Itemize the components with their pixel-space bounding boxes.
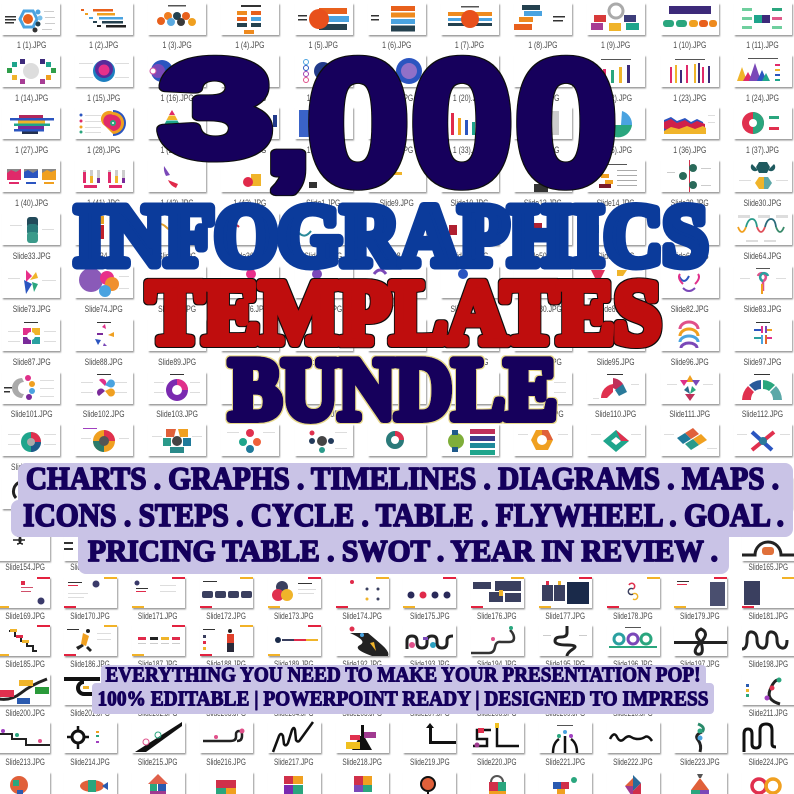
labels row 1: 1 (11).JPG [746,40,779,50]
thumbnail row 7 [2,319,793,352]
lower labels row 5: Slide213.JPG [5,757,45,767]
labels row 3: 1 (37).JPG [746,145,779,155]
lower labels row 4: Slide200.JPG [5,708,45,718]
labels row 2: 1 (21).JPG [526,93,559,103]
lower labels row 4: Slide203.JPG [206,708,246,718]
labels row 8: Slide101.JPG [11,409,53,419]
labels row 1: 1 (3).JPG [163,40,192,50]
lower labels row 3: Slide193.JPG [410,659,450,669]
labels row 2: 1 (20).JPG [453,93,486,103]
thumbnail row 1 [2,3,793,36]
digit 3: 3 [160,33,272,184]
labels row 3: 1 (31).JPG [307,145,340,155]
panel background [11,463,793,574]
thumbnail row 9 [2,424,793,458]
lower labels row 2: Slide176.JPG [477,611,517,621]
labels row 5: Slide35.JPG [158,251,196,261]
lower labels row 5 [5,757,788,767]
labels row 1: 1 (1).JPG [17,40,46,50]
lower labels row 1: Slide154.JPG [5,562,45,572]
lower labels row 2: Slide181.JPG [748,611,788,621]
lower labels row 5: Slide221.JPG [545,757,585,767]
lower labels row 3 [5,659,788,669]
lower labels row 1 [5,562,788,572]
lower labels row 5: Slide214.JPG [70,757,110,767]
lower row 3 [0,625,794,658]
lower labels row 3: Slide189.JPG [274,659,314,669]
labels row 4: 1 (41).JPG [87,198,120,208]
lower labels row 3: Slide185.JPG [5,659,45,669]
lower labels row 2: Slide173.JPG [274,611,314,621]
labels row 2: 1 (19).JPG [380,93,413,103]
thumbnail row 5 [2,213,793,246]
labels row 1: 1 (10).JPG [673,40,706,50]
labels row 5: Slide48.JPG [378,251,416,261]
labels row 8: Slide104.JPG [229,409,271,419]
labels row 5 [13,251,781,261]
tagline line 2: 100% EDITABLE | POWERPOINT READY | DESIGNED TO IMPRESS [98,686,709,710]
labels row 4 [15,198,781,208]
panel: categories [11,460,793,574]
labels row 2: 1 (15).JPG [87,93,120,103]
labels row 6: Slide75.JPG [158,304,196,314]
labels row 8: Slide102.JPG [83,409,125,419]
lower labels row 3: Slide186.JPG [70,659,110,669]
comma: , [266,64,310,198]
labels row 10: Slide152.JPG [742,514,783,524]
labels row 7: Slide96.JPG [671,357,709,367]
labels row 6: Slide78.JPG [378,304,416,314]
lower labels row 2: Slide169.JPG [5,611,45,621]
labels row 3: 1 (28).JPG [87,145,120,155]
lower labels row 2: Slide178.JPG [613,611,653,621]
tagline background [92,665,714,714]
labels row 9 [11,462,783,472]
lower thumbnail grid [0,530,794,794]
lower labels row 4: Slide201.JPG [70,708,110,718]
lower labels row 4: Slide205.JPG [342,708,382,718]
lower labels row 5: Slide219.JPG [410,757,450,767]
tagline line 1: EVERYTHING YOU NEED TO MAKE YOUR PRESENTATION POP! [106,662,700,686]
labels row 3: 1 (33).JPG [453,145,486,155]
labels row 2: 1 (18).JPG [307,93,340,103]
labels row 1: 1 (6).JPG [382,40,411,50]
labels row 4: 1 (40).JPG [15,198,48,208]
labels row 9: Slide128.JPG [742,462,783,472]
labels row 1: 1 (8).JPG [528,40,557,50]
labels row 7: Slide93.JPG [450,357,488,367]
lower labels row 3: Slide198.JPG [748,659,788,669]
labels row 5: Slide49.JPG [450,251,488,261]
lower labels row 5: Slide218.JPG [342,757,382,767]
lower labels row 4 [5,708,788,718]
labels row 2: 1 (17).JPG [233,93,266,103]
labels row 1: 1 (9).JPG [601,40,630,50]
lower labels row 2: Slide171.JPG [138,611,177,621]
labels row 6 [13,304,781,314]
labels row 5: Slide46.JPG [304,251,342,261]
lower labels row 5: Slide224.JPG [748,757,788,767]
lower labels row 2: Slide174.JPG [342,611,382,621]
headline: INFOGRAPHICS: INFOGRAPHICS [74,186,708,284]
lower labels row 5: Slide222.JPG [613,757,653,767]
labels row 5: Slide36.JPG [231,251,269,261]
labels row 1: 1 (5).JPG [309,40,338,50]
labels row 7: Slide88.JPG [85,357,123,367]
thumbnail row 4 [2,160,793,194]
labels row 8: Slide106.JPG [376,409,418,419]
labels row 2: 1 (14).JPG [15,93,48,103]
labels row 4: Slide29.JPG [671,198,709,208]
labels row 7: Slide92.JPG [378,357,416,367]
lower labels row 5: Slide216.JPG [206,757,246,767]
lower labels row 1: Slide165.JPG [748,562,788,572]
labels row 6: Slide74.JPG [85,304,123,314]
labels row 8: Slide103.JPG [156,409,198,419]
upper file-name labels [11,40,783,524]
labels row 6: Slide80.JPG [524,304,562,314]
lower row 1 [0,530,794,562]
labels row 8: Slide111.JPG [669,409,710,419]
labels row 2 [15,93,779,103]
lower labels row 2: Slide172.JPG [206,611,246,621]
labels row 3: 1 (30).JPG [233,145,266,155]
labels row 1: 1 (7).JPG [455,40,484,50]
labels row 4: 1 (42).JPG [161,198,194,208]
lower labels row 2: Slide170.JPG [70,611,110,621]
labels row 7: Slide89.JPG [158,357,196,367]
labels row 3: 1 (27).JPG [15,145,48,155]
categories line 3: PRICING TABLE . SWOT . YEAR IN REVIEW . [88,533,718,568]
labels row 2: 1 (22).JPG [599,93,632,103]
labels row 8: Slide107.JPG [449,409,490,419]
lower row 2 [0,577,794,610]
lower row 5 [0,722,794,754]
labels row 1: 1 (4).JPG [235,40,264,50]
lower labels row 4: Slide207.JPG [410,708,450,718]
lower labels row 4: Slide209.JPG [545,708,585,718]
labels row 5: Slide64.JPG [743,251,781,261]
labels row 3: 1 (34).JPG [526,145,559,155]
labels row 6: Slide83.JPG [743,304,781,314]
labels row 5: Slide34.JPG [85,251,123,261]
thumbnail row 8 [2,372,793,406]
labels row 4: Slide10.JPG [450,198,488,208]
lower labels row 4: Slide204.JPG [274,708,314,718]
labels row 7: Slide87.JPG [13,357,51,367]
labels row 5: Slide33.JPG [13,251,51,261]
panel: tagline [92,662,714,714]
labels row 1: 1 (2).JPG [89,40,118,50]
labels row 7: Slide95.JPG [597,357,635,367]
lower labels row 5: Slide217.JPG [274,757,314,767]
thumbnail row 6 [2,266,793,300]
labels row 8 [11,409,783,419]
labels row 2: 1 (16).JPG [161,93,194,103]
labels row 8: Slide110.JPG [595,409,636,419]
labels row 6: Slide77.JPG [304,304,342,314]
labels row 8: Slide108.JPG [522,409,564,419]
labels row 5: Slide60.JPG [671,251,709,261]
lower labels row 3: Slide197.JPG [680,659,720,669]
lower file-name labels [5,562,788,767]
headline: 3,000 [160,23,618,222]
lower labels row 5: Slide223.JPG [680,757,720,767]
labels row 6: Slide82.JPG [671,304,709,314]
lower labels row 5: Slide220.JPG [477,757,517,767]
labels row 4: Slide30.JPG [743,198,781,208]
labels row 5: Slide52.JPG [597,251,635,261]
thumbnail row 2 [2,55,793,88]
lower labels row 2: Slide177.JPG [545,611,585,621]
lower labels row 3: Slide192.JPG [342,659,382,669]
labels row 9: Slide115.JPG [11,462,52,472]
labels row 7: Slide90.JPG [231,357,269,367]
headline: TEMPLATES: TEMPLATES [147,264,661,362]
labels row 3: 1 (29).JPG [161,145,194,155]
zeros: 000 [306,23,618,222]
labels row 2: 1 (23).JPG [673,93,706,103]
labels row 3 [15,145,779,155]
lower labels row 1: Slide155.JPG [70,562,110,572]
labels row 6: Slide81.JPG [597,304,635,314]
lower labels row 5: Slide215.JPG [138,757,177,767]
labels row 1 [17,40,779,50]
labels row 4: Slide13.JPG [524,198,562,208]
labels row 7: Slide91.JPG [304,357,342,367]
labels row 4: Slide9.JPG [380,198,414,208]
labels row 8: Slide105.JPG [302,409,344,419]
lower labels row 2 [5,611,788,621]
lower labels row 3: Slide194.JPG [477,659,517,669]
lower row 6 [0,772,794,794]
labels row 6: Slide73.JPG [13,304,51,314]
labels row 4: Slide14.JPG [597,198,635,208]
thumbnail row 3 [2,107,793,140]
lower row 4 [0,674,794,706]
labels row 3: 1 (36).JPG [673,145,706,155]
labels row 4: Slide1.JPG [306,198,340,208]
labels row 7: Slide94.JPG [524,357,562,367]
headline: BUNDLE: BUNDLE [229,342,557,438]
labels row 4: 1 (43).JPG [233,198,266,208]
lower labels row 2: Slide179.JPG [680,611,720,621]
lower labels row 4: Slide211.JPG [749,708,788,718]
lower labels row 3: Slide188.JPG [206,659,246,669]
labels row 3: 1 (35).JPG [599,145,632,155]
labels row 10 [11,514,783,524]
labels row 7: Slide97.JPG [743,357,781,367]
labels row 2: 1 (24).JPG [746,93,779,103]
lower labels row 4: Slide210.JPG [613,708,653,718]
labels row 7 [13,357,781,367]
lower labels row 3: Slide195.JPG [545,659,585,669]
lower labels row 4: Slide202.JPG [138,708,177,718]
labels row 10: Slide141.JPG [11,514,53,524]
labels row 6: Slide79.JPG [450,304,488,314]
labels row 8: Slide112.JPG [742,409,783,419]
lower labels row 3: Slide187.JPG [138,659,177,669]
upper thumbnail grid [2,3,793,510]
lower labels row 3: Slide196.JPG [613,659,653,669]
labels row 3: 1 (32).JPG [380,145,413,155]
labels row 5: Slide50.JPG [524,251,562,261]
labels row 6: Slide76.JPG [231,304,269,314]
lower labels row 4: Slide208.JPG [477,708,517,718]
lower labels row 2: Slide175.JPG [410,611,450,621]
thumbnails hidden behind the category panel [2,477,793,510]
